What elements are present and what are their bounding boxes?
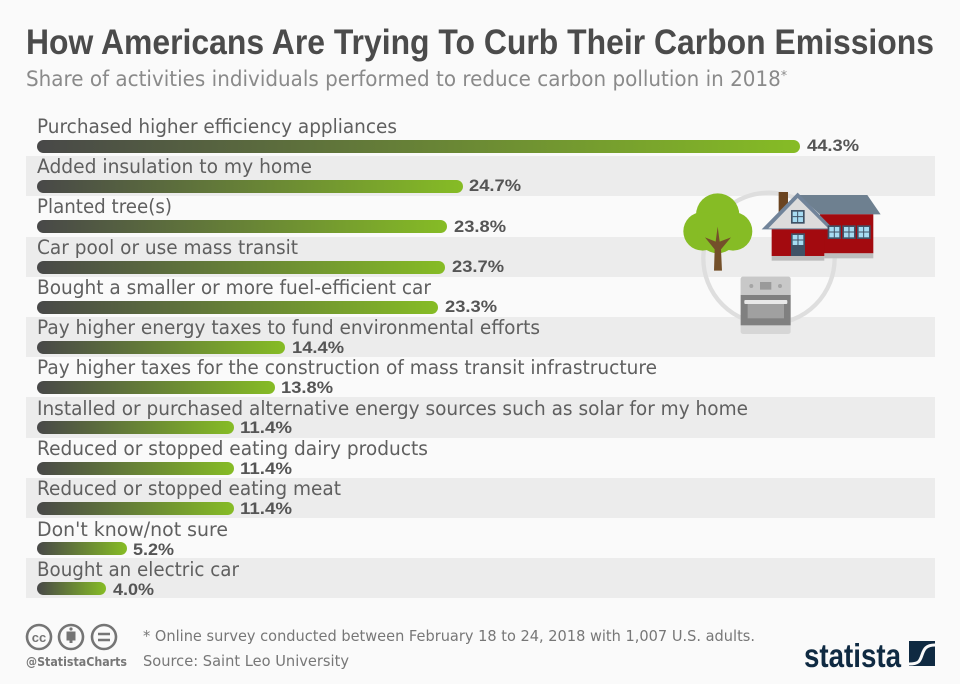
row: alternative energy: 11.4% [240,418,292,437]
icon: creative commons licence: cc [32,630,46,645]
row: dairy [37,437,428,478]
row: transit taxes: Pay higher taxes for the construction of mass transit infrastructure [37,356,657,379]
row: transit taxes: 13.8% [281,378,333,397]
row: don't know [37,518,228,559]
row: dairy: 11.4% [240,459,292,478]
row: smaller car: Bought a smaller or more fuel-efficient car [37,276,432,299]
subtitle: * [781,69,787,84]
row: energy taxes: Pay higher energy taxes to fund environmental efforts [37,316,540,339]
row: don't know: Don't know/not sure [37,518,228,541]
icon: creative commons licence [27,625,116,649]
row: meat: 11.4% [240,499,292,518]
row: meat: Reduced or stopped eating meat [37,477,341,500]
row: car pool: Car pool or use mass transit [37,236,298,259]
subtitle: Share of activities individuals performed to reduce carbon pollution in 2018 [26,67,821,91]
row: alternative energy [37,397,748,437]
row: trees: Planted tree(s) [37,195,172,218]
footnote: * Online survey conducted between February 18 to 24, 2018 with 1,007 U.S. adults. [143,627,755,645]
row: don't know: 5.2% [133,540,174,559]
row: electric car: 4.0% [113,580,154,599]
source: Source: Saint Leo University [143,652,349,670]
icon: tree [683,193,752,271]
statista logo: statista [804,637,902,674]
row: electric car: Bought an electric car [37,558,240,581]
row: electric car [37,558,240,599]
row: dairy: Reduced or stopped eating dairy products [37,437,428,460]
row: energy taxes: 14.4% [292,338,344,357]
row: smaller car [37,276,497,316]
illustration: home, tree and oven in a circle [683,192,881,334]
credit handle: @StatistaCharts [26,655,127,669]
icon: oven [741,277,791,334]
row: insulation: 24.7% [469,176,521,195]
row: transit taxes [37,356,657,397]
row: appliances: 44.3% [807,136,859,155]
row: appliances [37,115,859,155]
row: car pool [37,236,504,276]
row: insulation: Added insulation to my home [37,155,312,178]
row: alternative energy: Installed or purchased alternative energy sources such as solar for my home [37,397,748,420]
row: trees: 23.8% [454,217,506,236]
row: trees [37,195,506,236]
row: insulation [37,155,521,195]
row: meat [37,477,341,518]
row: smaller car: 23.3% [445,297,497,316]
row: energy taxes [37,316,540,357]
icon: house [762,192,881,261]
row: appliances: Purchased higher efficiency appliances [37,115,397,138]
row: car pool: 23.7% [452,257,504,276]
